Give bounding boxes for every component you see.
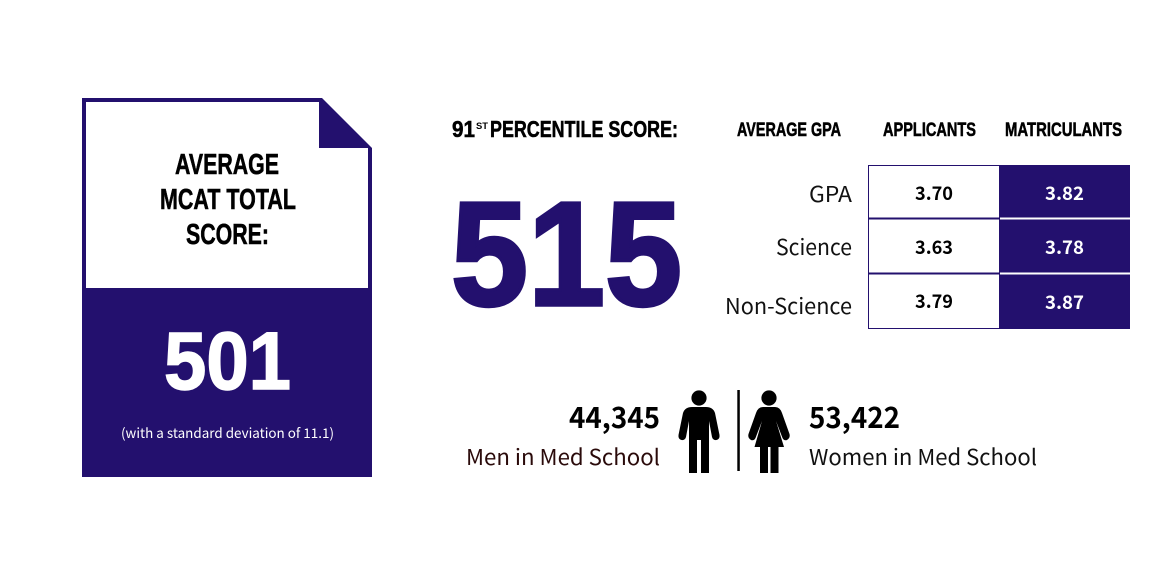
table column headers: MATRICULANTS	[1005, 120, 1122, 141]
row labels	[725, 177, 853, 321]
men in med school stat: Men in Med School	[466, 440, 660, 472]
row labels: GPA	[809, 177, 853, 209]
91st percentile score number: 515	[451, 172, 682, 337]
men in med school stat: 44,345	[569, 395, 660, 437]
row labels: Science	[776, 230, 852, 262]
heading: 91st percentile score	[452, 116, 678, 142]
row labels: Non-Science	[725, 289, 852, 321]
applicants values: 3.70	[915, 180, 953, 206]
matriculants values: 3.87	[1045, 289, 1084, 315]
applicants values	[915, 180, 953, 314]
matriculants values: 3.82	[1045, 180, 1084, 206]
heading: average MCAT total score: SCORE:	[186, 219, 269, 251]
document shape	[82, 98, 372, 477]
heading: average MCAT total score: AVERAGE	[175, 149, 279, 181]
document white area	[86, 102, 368, 288]
applicants values: 3.79	[915, 288, 953, 314]
heading: 91st percentile score: 91	[452, 116, 475, 142]
icon: woman	[748, 390, 790, 473]
heading: 91st percentile score: ST	[476, 121, 489, 131]
applicants row dividers	[868, 218, 1000, 274]
average score number: 501	[164, 316, 291, 407]
matriculants row dividers	[1000, 218, 1130, 274]
men in med school stat	[466, 395, 660, 472]
matriculants values: 3.78	[1045, 234, 1084, 260]
panel: average MCAT document	[82, 98, 372, 477]
heading: average MCAT total score: MCAT TOTAL	[160, 184, 296, 216]
table: average GPA	[725, 120, 1130, 329]
applicants values: 3.63	[915, 234, 953, 260]
women in med school stat: Women in Med School	[809, 440, 1037, 472]
heading: 91st percentile score: PERCENTILE SCORE:	[490, 116, 678, 142]
table column headers: APPLICANTS	[883, 120, 976, 141]
divider between men and women	[737, 390, 740, 471]
icon: man	[678, 390, 720, 473]
matriculants values	[1045, 180, 1084, 315]
matriculants column	[1000, 165, 1130, 329]
heading: average MCAT total score	[160, 149, 296, 251]
women in med school stat: 53,422	[809, 395, 900, 437]
applicants column	[868, 166, 1000, 328]
table column headers	[737, 120, 1122, 141]
women in med school stat	[809, 395, 1037, 472]
standard deviation note: (with a standard deviation of 11.1)	[121, 422, 334, 442]
table column headers: AVERAGE GPA	[737, 120, 841, 141]
